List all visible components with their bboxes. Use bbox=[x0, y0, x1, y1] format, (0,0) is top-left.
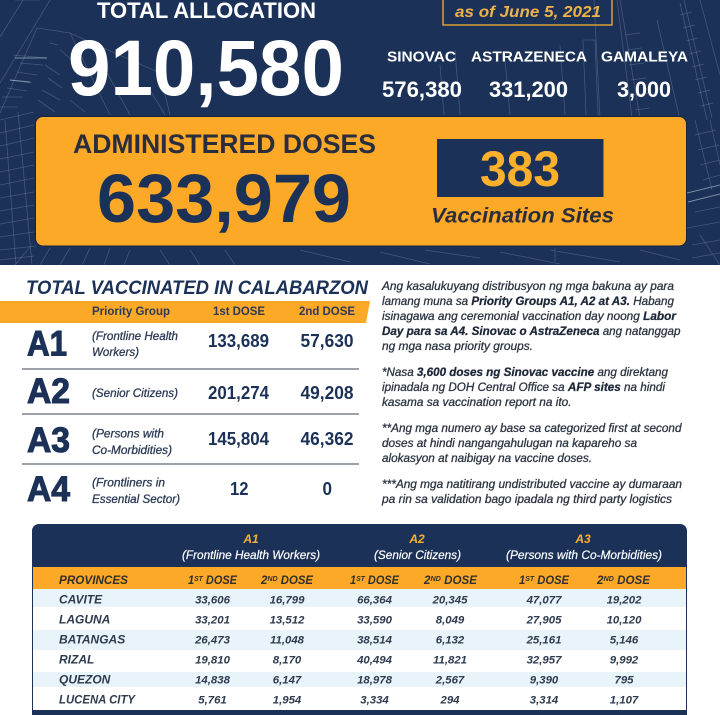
orange column header: DOSE bbox=[534, 573, 570, 587]
A2 group header bbox=[374, 532, 461, 562]
row: A3: 46,362 bbox=[300, 429, 354, 449]
gamaleya: 3,000 bbox=[617, 77, 671, 102]
note: undistributed vaccine: ***Ang mga natitirang undistributed vaccine ay dumaraan bbox=[382, 479, 682, 491]
row: A2: (Senior Citizens) bbox=[92, 386, 178, 400]
row: Batangas: 38,514 bbox=[357, 634, 393, 646]
row: Laguna: 33,201 bbox=[195, 614, 230, 626]
note: distribution: ng mga nasa priority groups. bbox=[382, 341, 533, 353]
note: distribution: Ang kasalukuyang distribusyon ng mga bakuna ay para bbox=[381, 281, 674, 293]
row: Rizal bbox=[59, 652, 639, 666]
total allocation number: 910,580 bbox=[68, 23, 344, 112]
orange column header: DOSE bbox=[203, 573, 238, 587]
row: Cavite bbox=[59, 592, 642, 606]
table frame bbox=[32, 524, 687, 715]
row: A2: A2 bbox=[27, 372, 70, 411]
orange column header: ST bbox=[525, 574, 535, 583]
row: Batangas: 26,473 bbox=[194, 634, 231, 646]
row: Rizal: 9,992 bbox=[610, 654, 639, 666]
vaccination sites badge bbox=[437, 139, 604, 197]
row: A1 bbox=[27, 324, 354, 364]
note: distribution: isinagawa ang ceremonial vaccination day noong Labor bbox=[382, 311, 677, 323]
sinovac bbox=[382, 48, 462, 102]
orange column header: 2 bbox=[424, 573, 431, 587]
date badge: as of June 5, 2021 bbox=[455, 4, 601, 21]
row: Rizal: 11,821 bbox=[433, 654, 467, 666]
A3 group header: A3 bbox=[574, 532, 591, 546]
row bands bbox=[33, 589, 686, 710]
orange column header: DOSE bbox=[614, 573, 651, 587]
row: Quezon: 2,567 bbox=[435, 674, 465, 686]
row: Laguna: 33,590 bbox=[357, 614, 393, 626]
row: Cavite: 33,606 bbox=[195, 594, 231, 606]
A3 group header: (Persons with Co-Morbidities) bbox=[506, 548, 662, 562]
table header band: 2nd DOSE bbox=[299, 304, 355, 318]
orange column header: DOSE bbox=[365, 573, 400, 587]
row: Quezon: 9,390 bbox=[530, 674, 559, 686]
row: Cavite: 16,799 bbox=[270, 594, 305, 606]
orange column header: 1 bbox=[188, 573, 195, 587]
sinovac: SINOVAC bbox=[387, 48, 456, 66]
row: A4: Essential Sector) bbox=[92, 492, 180, 506]
row: A3: (Persons with bbox=[92, 426, 164, 440]
row: Batangas: 11,048 bbox=[270, 634, 305, 646]
row: Laguna: 8,049 bbox=[436, 614, 465, 626]
A2 group header: A2 bbox=[408, 532, 425, 546]
orange column header: 2 bbox=[597, 573, 604, 587]
row: A1: 57,630 bbox=[300, 331, 354, 351]
note: categorized doses: doses at hindi nangangahulugan na kapareho sa bbox=[382, 438, 637, 450]
A3 group header bbox=[506, 532, 662, 562]
note: AFP sites: *Nasa 3,600 doses ng Sinovac vaccine ang direktang bbox=[382, 367, 669, 379]
table header band: Priority Group bbox=[92, 304, 170, 318]
row: Laguna bbox=[59, 612, 642, 626]
row: A3: A3 bbox=[27, 421, 70, 460]
note: distribution: Day para sa A4. Sinovac o AstraZeneca ang natanggap bbox=[382, 326, 681, 338]
row: Quezon: 18,978 bbox=[357, 674, 393, 686]
administered doses heading: ADMINISTERED DOSES bbox=[73, 129, 376, 159]
row: A4 bbox=[27, 470, 332, 509]
row: Quezon bbox=[59, 672, 634, 686]
row: Cavite: CAVITE bbox=[59, 592, 103, 606]
note: AFP sites: ipinadala ng DOH Central Office sa AFP sites na hindi bbox=[382, 382, 665, 394]
A1 group header: A1 bbox=[242, 532, 259, 546]
note: AFP sites bbox=[382, 367, 669, 409]
row: A1: 133,689 bbox=[208, 331, 269, 351]
astrazeneca: 331,200 bbox=[489, 77, 568, 102]
text block: distribution notes bbox=[381, 281, 682, 506]
note: undistributed vaccine: pa rin sa validation bago ipadala ng third party logistics bbox=[381, 494, 672, 506]
row: Batangas: 5,146 bbox=[610, 634, 639, 646]
date badge bbox=[443, 0, 612, 25]
note: categorized doses bbox=[382, 423, 682, 465]
row: A4: (Frontliners in bbox=[92, 476, 165, 490]
row: Cavite: 19,202 bbox=[607, 594, 642, 606]
row: Cavite: 20,345 bbox=[432, 594, 468, 606]
row: Lucena City: LUCENA CITY bbox=[59, 692, 136, 706]
note: categorized doses: alokasyon at naibigay na vaccine doses. bbox=[382, 453, 592, 465]
row: Cavite: 66,364 bbox=[357, 594, 393, 606]
orange column header: DOSE bbox=[278, 573, 314, 587]
row: Batangas bbox=[59, 632, 639, 646]
table header band bbox=[0, 301, 370, 323]
row: Rizal: 8,170 bbox=[273, 654, 302, 666]
note: categorized doses: **Ang mga numero ay base sa categorized first at second bbox=[382, 423, 682, 435]
group headers bbox=[182, 532, 662, 562]
row: Quezon: QUEZON bbox=[59, 672, 111, 686]
row: A1: Workers) bbox=[92, 345, 139, 359]
vaccine brand breakdown bbox=[382, 48, 688, 102]
orange column header: ND bbox=[430, 574, 441, 583]
orange column header: ND bbox=[603, 574, 614, 583]
panel: allocation header background bbox=[0, 0, 720, 265]
gamaleya bbox=[601, 48, 688, 102]
row: Lucena City: 3,334 bbox=[360, 694, 389, 706]
astrazeneca: ASTRAZENECA bbox=[471, 48, 587, 66]
orange column header bbox=[33, 567, 686, 589]
orange column header: 1 bbox=[519, 573, 526, 587]
row: A1: (Frontline Health bbox=[92, 329, 178, 343]
panel: provinces table bbox=[32, 524, 687, 715]
row: Lucena City: 294 bbox=[439, 694, 460, 706]
vaccination sites label: Vaccination Sites bbox=[431, 204, 614, 228]
administered doses number: 633,979 bbox=[97, 160, 351, 237]
row: Laguna: LAGUNA bbox=[59, 612, 110, 626]
orange column header: ST bbox=[194, 574, 204, 583]
row: A3: 145,804 bbox=[208, 429, 269, 449]
heading: total vaccinated in calabarzon: TOTAL VACCINATED IN CALABARZON bbox=[26, 278, 369, 299]
row: A2: 201,274 bbox=[208, 383, 269, 403]
A2 group header: (Senior Citizens) bbox=[374, 548, 461, 562]
row: A1: A1 bbox=[27, 324, 67, 364]
row: Cavite: 47,077 bbox=[526, 594, 562, 606]
row: Lucena City: 1,954 bbox=[273, 694, 302, 706]
row: Batangas: BATANGAS bbox=[59, 632, 125, 646]
note: distribution: lamang muna sa Priority Groups A1, A2 at A3. Habang bbox=[382, 296, 675, 308]
row: Lucena City: 1,107 bbox=[610, 694, 639, 706]
orange column header: DOSE bbox=[441, 573, 478, 587]
row: A4: 12 bbox=[230, 479, 248, 499]
row: Batangas: 25,161 bbox=[526, 634, 561, 646]
orange column header: PROVINCES bbox=[59, 573, 128, 587]
row: Rizal: 19,810 bbox=[195, 654, 231, 666]
row: Lucena City: 3,314 bbox=[530, 694, 559, 706]
row: Laguna: 10,120 bbox=[607, 614, 642, 626]
panel: administered doses bbox=[35, 116, 687, 246]
row: A4: A4 bbox=[27, 470, 71, 509]
row: Rizal: 40,494 bbox=[356, 654, 393, 666]
note: undistributed vaccine bbox=[381, 479, 682, 506]
row: A3 bbox=[27, 421, 354, 460]
vaccination sites badge: 383 bbox=[480, 141, 560, 197]
row: A4: 0 bbox=[322, 479, 332, 499]
gamaleya: GAMALEYA bbox=[601, 48, 688, 66]
row: Lucena City bbox=[59, 692, 639, 706]
row: Rizal: 32,957 bbox=[527, 654, 562, 666]
row: A3: Co-Morbidities) bbox=[92, 443, 172, 457]
row: Laguna: 13,512 bbox=[270, 614, 305, 626]
row: Quezon: 6,147 bbox=[273, 674, 302, 686]
orange column header: ST bbox=[356, 574, 366, 583]
row: Laguna: 27,905 bbox=[526, 614, 562, 626]
sinovac: 576,380 bbox=[382, 77, 462, 102]
row: A2 bbox=[27, 372, 354, 411]
row: Rizal: RIZAL bbox=[59, 652, 94, 666]
note: distribution bbox=[381, 281, 681, 353]
orange column header: 1 bbox=[350, 573, 357, 587]
row: Lucena City: 5,761 bbox=[198, 694, 227, 706]
orange column header: ND bbox=[267, 574, 278, 583]
note: AFP sites: kasama sa vaccination report na ito. bbox=[382, 397, 572, 409]
table header band: 1st DOSE bbox=[213, 304, 265, 318]
row: Quezon: 795 bbox=[614, 674, 634, 686]
row: A2: 49,208 bbox=[300, 383, 354, 403]
astrazeneca bbox=[471, 48, 587, 102]
row: Batangas: 6,132 bbox=[436, 634, 465, 646]
orange column header: 2 bbox=[261, 573, 268, 587]
A1 group header: (Frontline Health Workers) bbox=[182, 548, 320, 562]
row: Quezon: 14,838 bbox=[195, 674, 231, 686]
panel: priority group table bbox=[0, 301, 370, 509]
A1 group header bbox=[182, 532, 320, 562]
